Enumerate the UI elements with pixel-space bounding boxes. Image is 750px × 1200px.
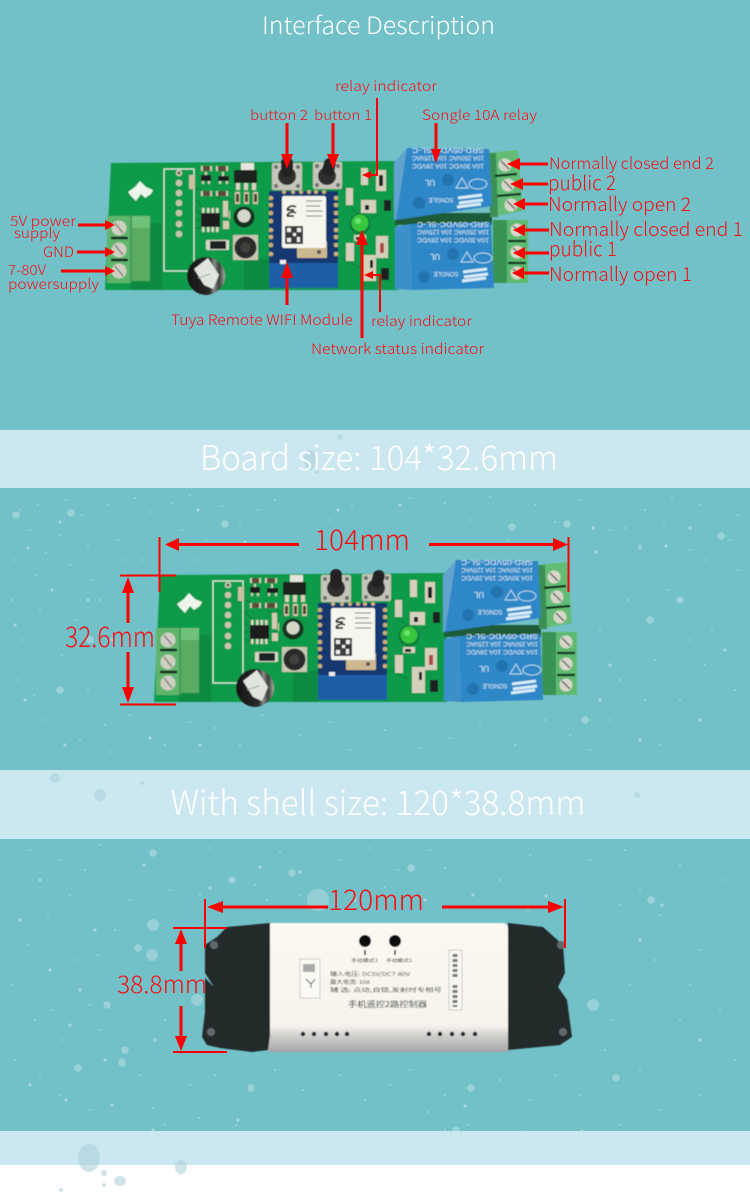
band: bottom: [0, 1131, 750, 1165]
heading: shell size: With shell size: 120*38.8mm: [170, 776, 586, 825]
relay markings bottom: [416, 220, 489, 276]
label: Normally closed end 2: Normally closed end 2: [549, 150, 714, 174]
relay markings bottom: SRD-05VDC-SL-C: [416, 220, 489, 229]
band: board size: [0, 430, 750, 488]
relay markings top: UL: [424, 178, 435, 187]
label: button 1: [314, 105, 372, 169]
label: button 1: button 1: [314, 105, 372, 125]
label: Tuya Remote WIFI Module: [171, 262, 353, 330]
label: relay indicator top: [335, 76, 438, 179]
label: 7-80V power supply: 7-80V: [8, 260, 46, 280]
relay markings bottom: 10A 250VAC 10A 125VAC: [416, 228, 489, 234]
relay markings bottom: UL: [429, 252, 440, 261]
label: public 1: [513, 233, 617, 262]
vent dots: [301, 1032, 477, 1036]
relay markings bottom: UL: [478, 664, 489, 673]
label: button 2: button 2: [250, 105, 308, 125]
band: shell size: [0, 770, 750, 839]
photo: enclosure: [202, 923, 572, 1052]
relay markings bottom: SONGLE: [433, 270, 459, 276]
title: Interface Description: [262, 6, 495, 41]
relay markings top: 10A 250VAC 10A 125VAC: [460, 566, 533, 572]
dimension: 38.8mm: 38.8mm: [117, 965, 207, 1000]
buttons: [359, 935, 371, 947]
side labels: [300, 959, 320, 998]
dimension: 120mm: [205, 879, 565, 948]
label: button 2: [250, 105, 308, 169]
relay markings top: SONGLE: [477, 608, 503, 614]
annotations: interface labels: [8, 76, 743, 359]
label: public 1: public 1: [549, 233, 617, 262]
label: Songle 10A relay: Songle 10A relay: [422, 105, 537, 125]
photo: enclosure: 手机遥控2路控制器: [348, 999, 427, 1010]
dimension: 104mm: 104mm: [314, 519, 410, 559]
relay markings top: SRD-05VDC-SL-C: [460, 558, 533, 567]
label: relay indicator bottom: relay indicator: [371, 311, 473, 331]
label: relay indicator top: relay indicator: [335, 76, 438, 96]
label: 5V power supply: 5V power: [10, 211, 77, 231]
photo: enclosure: 最大电流: 10A: [330, 978, 371, 986]
relay markings top: 10A 250VAC 10A 125VAC: [411, 154, 484, 160]
label: Tuya Remote WIFI Module: Tuya Remote WIFI Module: [171, 309, 353, 330]
faint spots on bands and footer: [50, 434, 640, 1192]
label: Network status indicator: Network status indicator: [311, 338, 485, 359]
label: 7-80V power supply: [8, 260, 115, 294]
dimension: 38.8mm: [117, 928, 227, 1052]
dimension: 32.6mm: [65, 576, 176, 704]
black end cap left: [202, 923, 270, 1052]
photo: circuit board dimensioned: [154, 558, 577, 707]
relay markings top: 10A 30VDC 10A 28VDC: [460, 574, 533, 580]
water splash bubbles: [12, 495, 738, 1155]
relay markings top: [460, 558, 533, 614]
photo: circuit board top: [105, 146, 528, 295]
label: Normally open 2: Normally open 2: [548, 190, 691, 217]
label: Network status indicator: [311, 230, 485, 359]
heading: board size: Board size: 104*32.6mm: [200, 431, 558, 480]
relay markings top: [411, 146, 484, 202]
product label: 输入电压: DC5V/DC7-80V: [330, 970, 411, 978]
relay markings bottom: 10A 250VAC 10A 125VAC: [465, 640, 538, 646]
relay markings bottom: SRD-05VDC-SL-C: [465, 632, 538, 641]
photo: enclosure: 手动模式2: [386, 957, 413, 964]
photo: enclosure: 手动模式1: [351, 957, 379, 964]
white shell body: [268, 923, 508, 1052]
relay markings bottom: 10A 30VDC 10A 28VDC: [416, 236, 489, 242]
photo: enclosure: 辅 选: 点动,自锁,发射时专相号: [330, 986, 443, 994]
label: GND: [43, 242, 115, 262]
relay markings top: 10A 30VDC 10A 28VDC: [411, 162, 484, 168]
label: Normally open 1: Normally open 1: [549, 260, 692, 287]
label: relay indicator bottom: [364, 271, 473, 331]
relay markings bottom: 10A 30VDC 10A 28VDC: [465, 648, 538, 654]
dimension: 32.6mm: 32.6mm: [65, 616, 155, 656]
relay markings top: UL: [473, 590, 484, 599]
label: Normally closed end 1: Normally closed end 1: [549, 215, 743, 242]
label: 5V power supply: supply: [14, 223, 60, 243]
label: 5V power supply: [10, 211, 115, 243]
black end cap right: [508, 923, 572, 1050]
relay markings top: SONGLE: [428, 196, 454, 202]
dimension: 104mm: [160, 519, 568, 592]
label: public 2: public 2: [548, 167, 616, 196]
label: public 2: [510, 167, 616, 196]
relay markings bottom: SONGLE: [482, 682, 508, 688]
button labels: [365, 950, 395, 955]
label: GND: GND: [43, 242, 74, 262]
screw holes: [207, 941, 567, 1036]
relay markings top: SRD-05VDC-SL-C: [411, 146, 484, 155]
relay markings bottom: [465, 632, 538, 688]
label: 7-80V power supply: powersupply: [8, 274, 99, 294]
label: Songle 10A relay: [422, 105, 537, 163]
white footer: [0, 1165, 750, 1200]
dimension: 120mm: 120mm: [328, 879, 424, 919]
